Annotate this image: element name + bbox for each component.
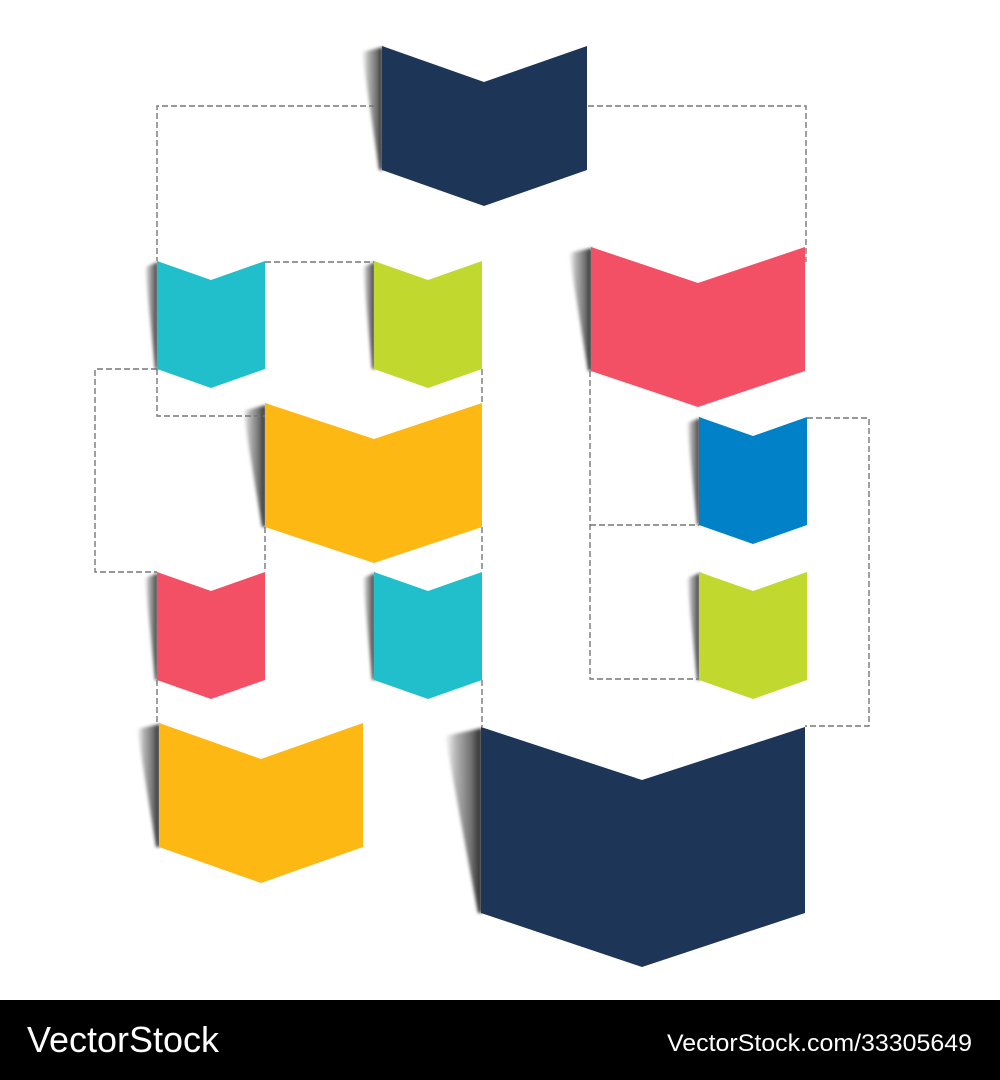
footer image id: VectorStock.com/33305649 [667,1030,972,1057]
chevron: lime lower [699,572,807,699]
shadows [137,47,700,913]
chevron: small red [157,572,265,699]
chevron: blue [699,417,807,544]
chevron: large amber [265,403,482,563]
dashed connectors [95,106,869,727]
chevron: large red [591,247,805,407]
chevron: teal lower [374,572,482,699]
chevron: lime upper [374,261,482,388]
chevron: top navy [382,46,587,206]
chevron: lower amber [159,723,363,883]
footer bar [0,1000,1000,1080]
footer logo text: VectorStock [27,1019,220,1060]
chevron: teal upper [157,261,265,388]
chevron: big navy [481,727,805,967]
